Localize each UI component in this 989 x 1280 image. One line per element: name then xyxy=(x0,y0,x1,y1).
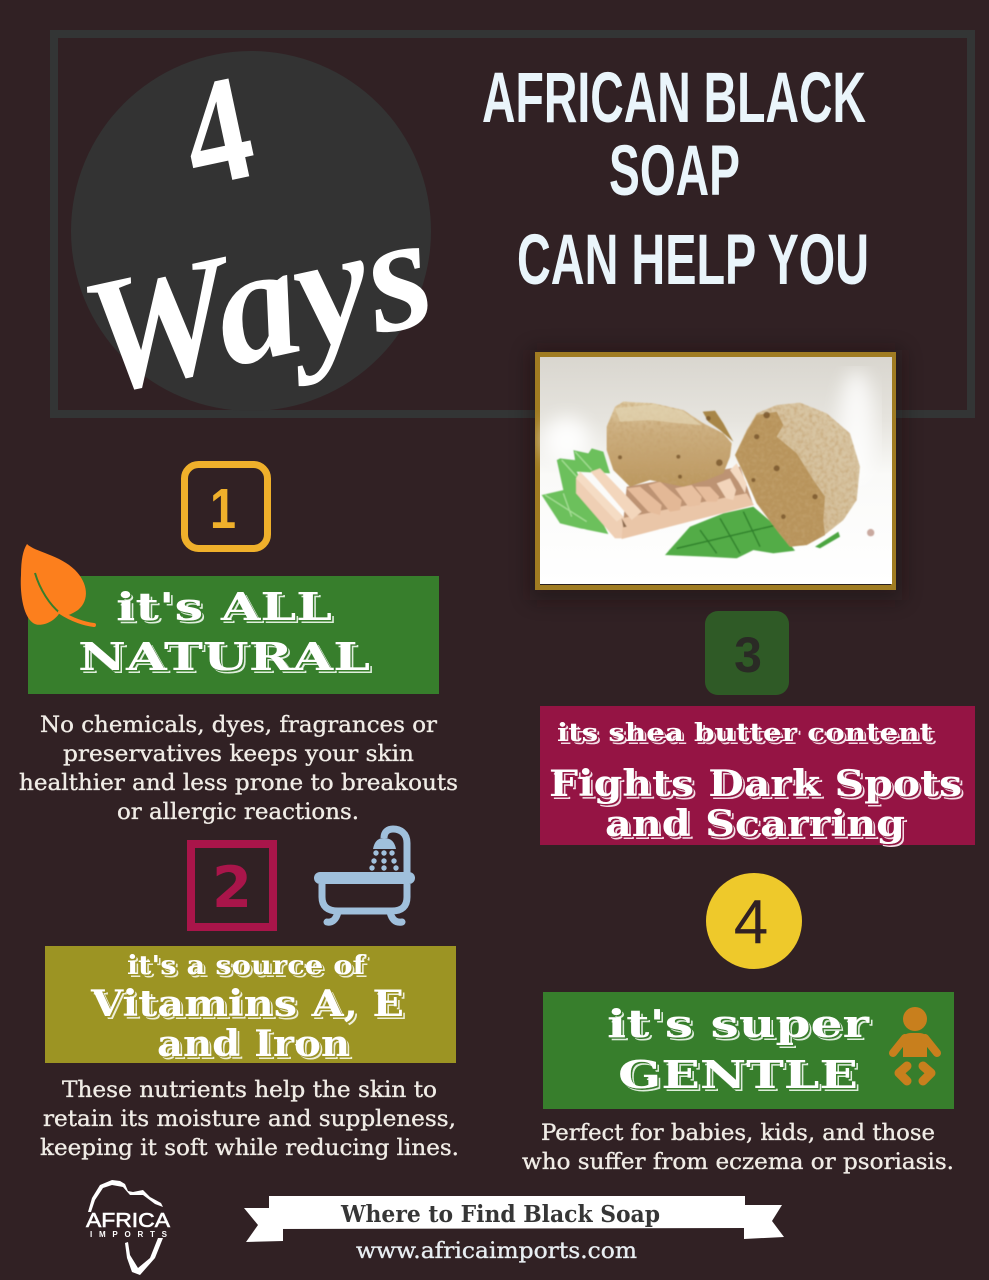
text: natural description: healthier and less prone to breakouts xyxy=(19,771,458,796)
icon: baby xyxy=(893,1007,937,1081)
text: vitamins description: keeping it soft while reducing lines. xyxy=(40,1136,459,1161)
icon: bathtub with shower xyxy=(314,829,415,922)
title: SOAP xyxy=(609,132,740,211)
text: gentle description: Perfect for babies, kids, and those xyxy=(541,1121,935,1146)
number badge 3 xyxy=(705,611,789,695)
panel: shea butter: its shea butter content xyxy=(557,718,934,747)
number badge 1: 1 xyxy=(210,477,236,541)
circle badge: 4 Ways: 4 xyxy=(167,42,267,220)
website url: www.africaimports.com xyxy=(356,1239,637,1264)
text: gentle description: who suffer from eczema or psoriasis. xyxy=(522,1150,954,1175)
number badge 2 xyxy=(191,844,273,927)
text: natural description: or allergic reactions. xyxy=(117,800,359,825)
panel: vitamins: Vitamins A, E xyxy=(90,983,404,1025)
ribbon banner: where to find black soap: Where to Find Black Soap xyxy=(340,1201,660,1228)
number badge 1 xyxy=(184,464,268,548)
text: natural description: No chemicals, dyes, fragrances or xyxy=(40,713,438,738)
ribbon banner: where to find black soap xyxy=(244,1196,784,1242)
circle badge: 4 Ways xyxy=(67,42,448,430)
panel: shea butter: Fights Dark Spots xyxy=(549,763,962,805)
number badge 2: 2 xyxy=(212,855,252,921)
text: natural description: preservatives keeps your skin xyxy=(63,742,414,767)
panel: it's all natural: it's ALL xyxy=(116,584,332,629)
title xyxy=(482,59,869,300)
header frame xyxy=(54,34,971,414)
photo: black soap on wooden dish xyxy=(530,350,902,600)
panel: vitamins: it's a source of xyxy=(127,951,367,981)
text: gentle description xyxy=(522,1121,954,1175)
panel: it's all natural: NATURAL xyxy=(78,634,370,679)
logo: Africa Imports xyxy=(86,1180,171,1275)
logo: Africa Imports: IMPORTS xyxy=(90,1230,168,1239)
circle badge: 4 Ways: Ways xyxy=(67,177,448,430)
panel: shea butter xyxy=(540,706,975,845)
text: vitamins description: These nutrients help the skin to xyxy=(62,1078,437,1103)
text: vitamins description: retain its moisture and suppleness, xyxy=(43,1107,456,1132)
panel: vitamins: and Iron xyxy=(157,1023,350,1065)
panel: it's all natural xyxy=(28,576,439,694)
text: natural description xyxy=(19,713,458,825)
panel: super gentle xyxy=(543,992,954,1109)
text: vitamins description xyxy=(40,1078,459,1161)
icon: orange leaf xyxy=(21,544,94,625)
panel: shea butter: and Scarring xyxy=(605,803,905,845)
panel: super gentle: GENTLE xyxy=(618,1052,858,1097)
number badge 4: 4 xyxy=(734,888,768,957)
panel: super gentle: it's super xyxy=(607,1001,870,1046)
number badge 4 xyxy=(706,873,802,969)
number badge 3: 3 xyxy=(734,627,762,683)
logo: Africa Imports: AFRICA xyxy=(86,1210,171,1232)
panel: vitamins xyxy=(45,946,456,1065)
